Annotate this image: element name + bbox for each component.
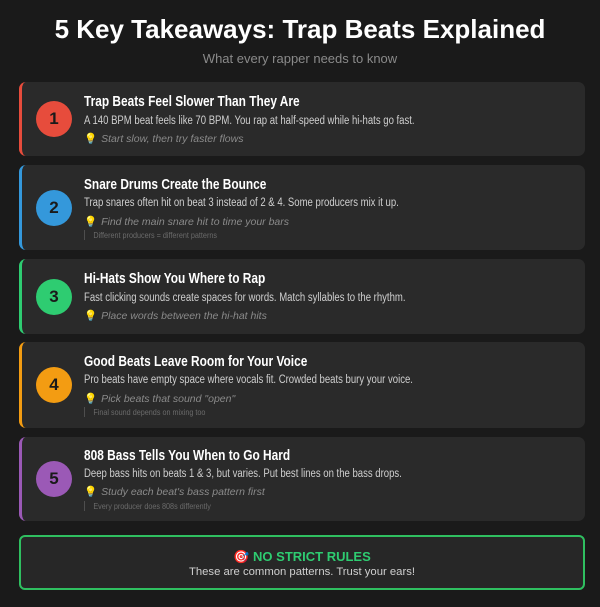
panel: takeaway 4 (19, 342, 585, 428)
panel: takeaway 2 (19, 165, 585, 250)
panel: takeaway 3 (19, 259, 585, 334)
heading 1: Trap Beats Feel Slower Than They Are (84, 94, 300, 110)
callout text: These are common patterns. Trust your ears! (189, 566, 415, 578)
text 3: Fast clicking sounds create spaces for words. Match syllables to the rhythm. (84, 292, 405, 304)
tip 1: 💡 Start slow, then try faster flows (84, 133, 243, 145)
icon: number 4: 4 (49, 375, 59, 394)
icon: number 2 (36, 190, 72, 226)
heading 3: Hi-Hats Show You Where to Rap (84, 271, 265, 287)
icon: number 1: 1 (49, 109, 59, 128)
note 2: Different producers = different patterns (93, 230, 217, 240)
callout: no strict rules (19, 535, 585, 590)
icon: number 5 (36, 461, 72, 497)
icon: number 3: 3 (49, 287, 59, 306)
tip 4: 💡 Pick beats that sound "open" (84, 393, 235, 405)
note 4: Final sound depends on mixing too (93, 407, 205, 417)
icon: number 4 (36, 367, 72, 403)
text 1: A 140 BPM beat feels like 70 BPM. You rap at half-speed while hi-hats go fast. (84, 115, 415, 127)
heading 4: Good Beats Leave Room for Your Voice (84, 354, 307, 370)
icon: number 5: 5 (49, 469, 59, 488)
callout heading: 🎯 NO STRICT RULES (233, 549, 371, 564)
icon: number 3 (36, 279, 72, 315)
tip 3: 💡 Place words between the hi-hat hits (84, 310, 267, 322)
tip 5: 💡 Study each beat's bass pattern first (84, 486, 265, 498)
panel: takeaway 5 (19, 437, 585, 521)
note 5: Every producer does 808s differently (93, 501, 211, 511)
heading 2: Snare Drums Create the Bounce (84, 177, 266, 193)
title: 5 Key Takeaways: Trap Beats Explained (55, 14, 545, 44)
text 4: Pro beats have empty space where vocals fit. Crowded beats bury your voice. (84, 374, 413, 386)
text 5: Deep bass hits on beats 1 & 3, but varies. Put best lines on the bass drops. (84, 468, 402, 480)
text 2: Trap snares often hit on beat 3 instead of 2 & 4. Some producers mix it up. (84, 197, 399, 209)
icon: number 2: 2 (49, 198, 59, 217)
tip 2: 💡 Find the main snare hit to time your bars (84, 216, 289, 228)
panel: takeaway 1 (19, 82, 585, 156)
subtitle: What every rapper needs to know (203, 51, 397, 66)
heading 5: 808 Bass Tells You When to Go Hard (84, 448, 290, 464)
icon: number 1 (36, 101, 72, 137)
